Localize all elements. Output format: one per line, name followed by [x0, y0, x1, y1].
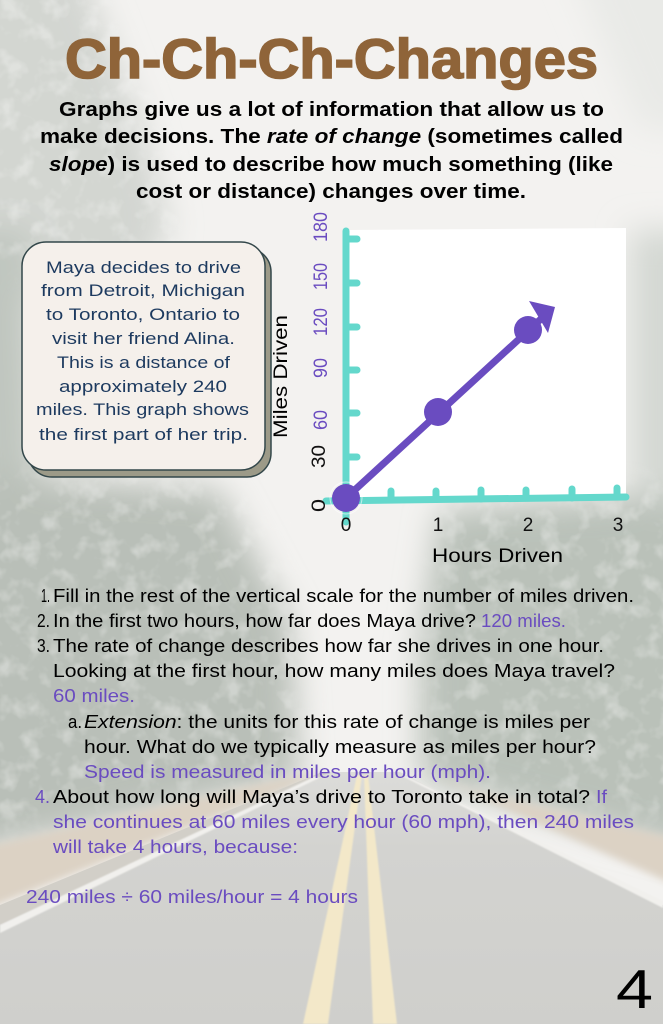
- story text: to Toronto, Ontario to: [46, 305, 240, 324]
- y axis answers: 90: [311, 358, 332, 378]
- y axis numbers given: [309, 445, 330, 512]
- question 3a: Extension : the units for this rate of change is miles per: [84, 712, 590, 732]
- question 3: The rate of change describes how far she drives in one hour.: [53, 636, 604, 656]
- x axis numbers: 0: [341, 515, 351, 536]
- x axis numbers: [341, 515, 623, 536]
- intro text: Graphs give us a lot of information that allow us to: [59, 99, 604, 121]
- question 3: 60 miles.: [53, 686, 135, 706]
- questions: [26, 586, 634, 907]
- question 4: If: [596, 787, 608, 807]
- data line with arrow: [330, 301, 555, 514]
- intro text: cost or distance) changes over time.: [136, 181, 526, 203]
- y axis answers: 150: [311, 263, 332, 290]
- story text: from Detroit, Michigan: [41, 281, 245, 300]
- y axis numbers given: 0: [309, 499, 330, 512]
- intro text: [40, 99, 623, 203]
- question 4: she continues at 60 miles every hour (60 mph), then 240 miles: [53, 812, 634, 832]
- question 3a: hour. What do we typically measure as miles per hour?: [84, 737, 596, 757]
- page number: 4: [616, 958, 653, 1020]
- story text: [36, 258, 249, 444]
- story text: This is a distance of: [57, 353, 230, 372]
- story text: visit her friend Alina.: [52, 329, 235, 348]
- story text: Maya decides to drive: [46, 258, 241, 277]
- equation: 240 miles ÷ 60 miles/hour = 4 hours: [26, 887, 358, 907]
- axes: [326, 231, 626, 522]
- y axis answers: 120: [311, 308, 332, 336]
- intro text: make decisions. The rate of change (sometimes called: [40, 126, 623, 148]
- question 4: 4.: [35, 787, 50, 807]
- question 2: In the first two hours, how far does Maya drive?: [53, 611, 476, 631]
- question 1: Fill in the rest of the vertical scale for the number of miles driven.: [53, 586, 634, 606]
- x axis numbers: 2: [523, 515, 533, 536]
- story text: the first part of her trip.: [39, 425, 248, 444]
- question 4: will take 4 hours, because:: [52, 837, 298, 857]
- question 3a: [68, 712, 596, 782]
- question 4: [35, 787, 634, 857]
- story text: miles. This graph shows: [36, 400, 249, 419]
- road surface: [0, 772, 663, 1024]
- x axis numbers: 1: [433, 515, 443, 536]
- y axis numbers given: 30: [309, 445, 330, 468]
- axis title: hours driven: Hours Driven: [432, 546, 563, 567]
- y axis answers: 180: [311, 212, 332, 242]
- line graph: [271, 212, 626, 567]
- road verges: [0, 772, 663, 912]
- story text: approximately 240: [59, 377, 227, 396]
- y axis answers: 60: [311, 410, 332, 430]
- question 2: 2.: [37, 611, 50, 631]
- question 3a: Speed is measured in miles per hour (mph).: [84, 762, 491, 782]
- question 1: 1.: [41, 586, 50, 606]
- story card: [22, 242, 271, 477]
- question 3a: a.: [68, 712, 82, 732]
- question 2: 120 miles.: [481, 611, 566, 631]
- question 4: About how long will Maya’s drive to Toronto take in total?: [53, 787, 590, 807]
- question 3: 3.: [37, 636, 50, 656]
- road lines: [0, 775, 663, 1024]
- axis title: miles driven: Miles Driven: [271, 315, 292, 438]
- question 3: Looking at the first hour, how many miles does Maya travel?: [53, 661, 615, 681]
- graph area: [347, 228, 626, 500]
- intro text: slope ) is used to describe how much something (like: [49, 154, 613, 176]
- y axis answers: [311, 212, 332, 430]
- question 3: [37, 636, 615, 706]
- x axis numbers: 3: [613, 515, 623, 536]
- title: Ch-Ch-Ch-Changes: [65, 27, 598, 90]
